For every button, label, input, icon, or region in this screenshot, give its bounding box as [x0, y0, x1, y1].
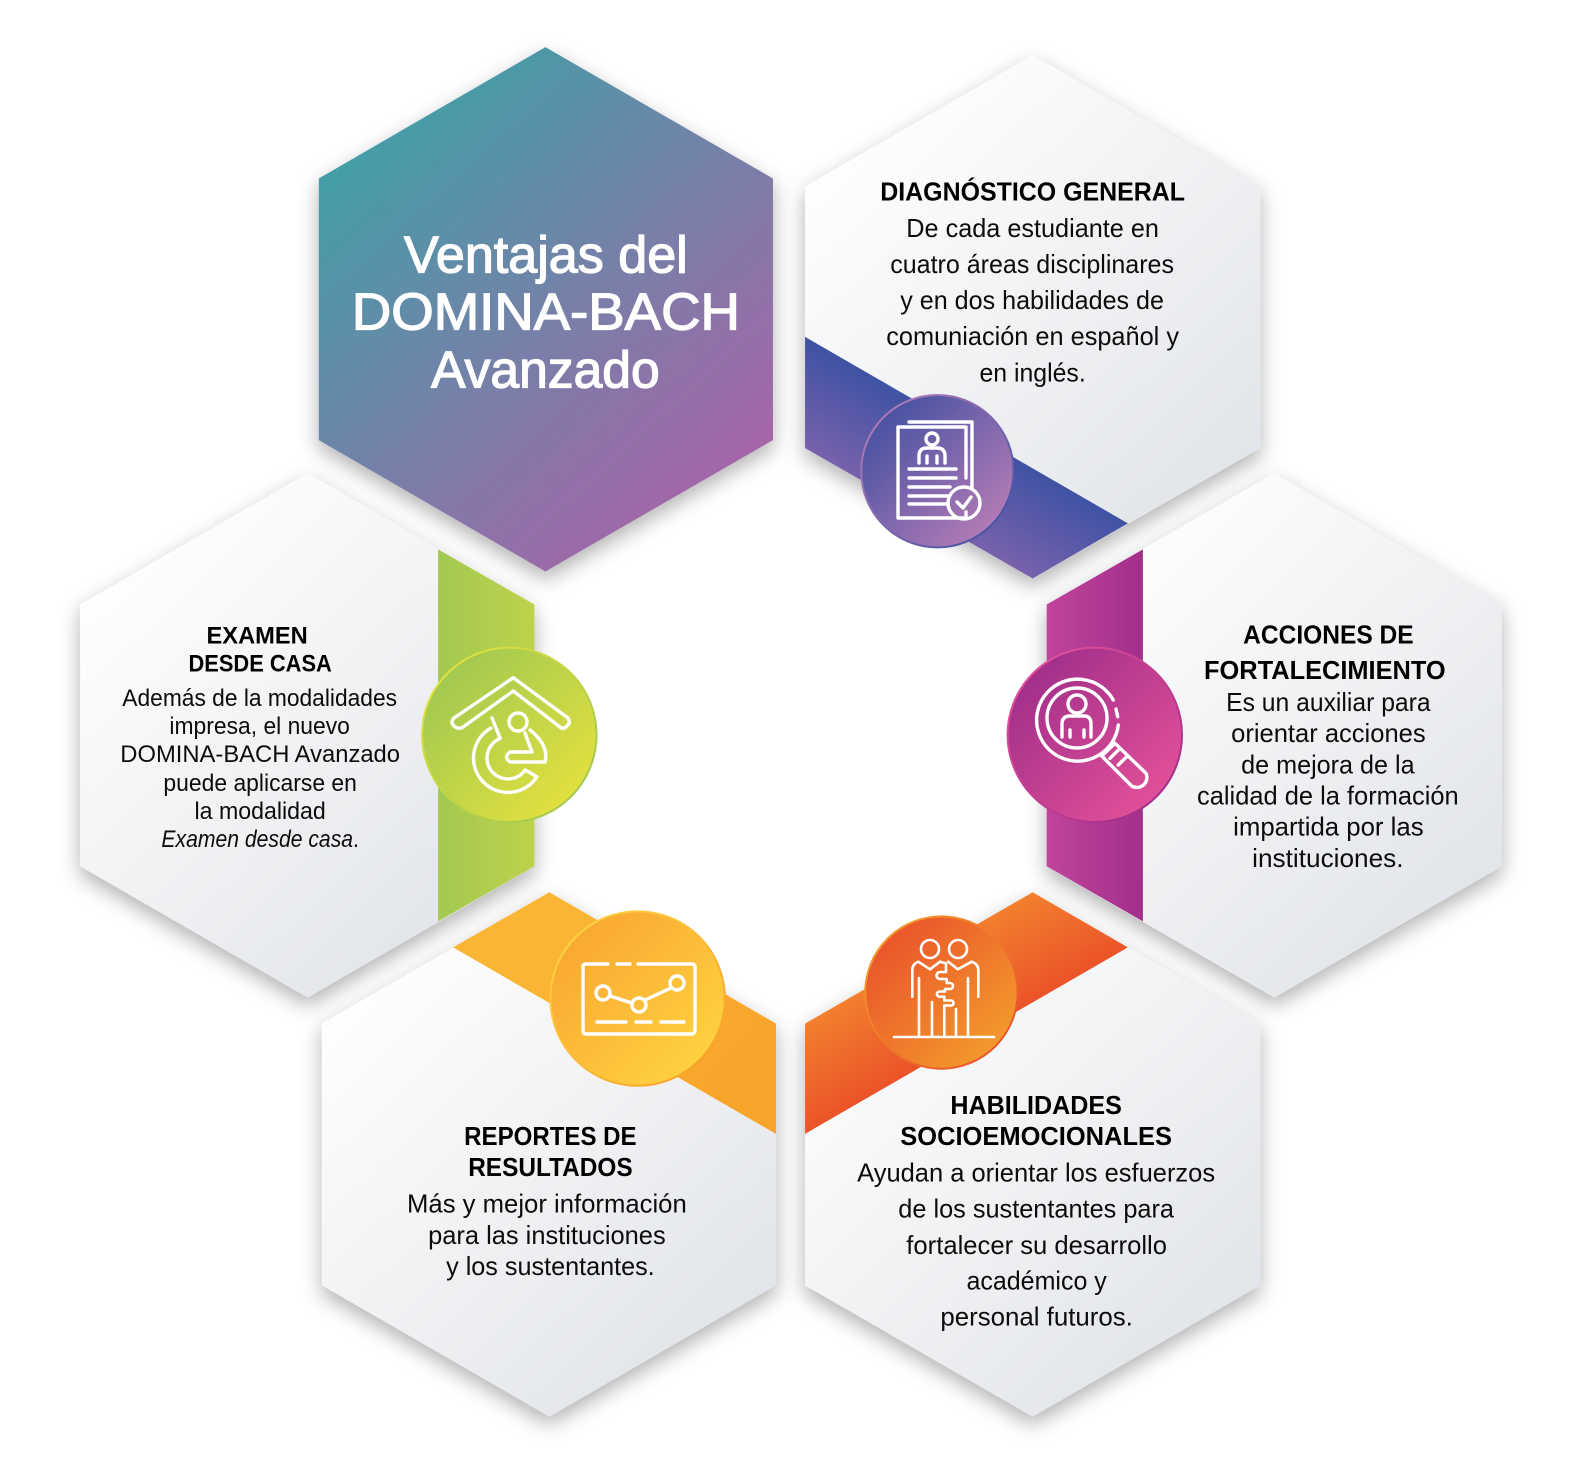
description: académico y: [966, 1265, 1107, 1295]
panel: title hexagon: [319, 47, 773, 571]
heading: FORTALECIMIENTO: [1204, 655, 1446, 685]
description: impresa, el nuevo: [169, 713, 350, 740]
heading: RESULTADOS: [468, 1152, 633, 1182]
heading: [1204, 620, 1446, 685]
heading: [464, 1121, 637, 1182]
title: Ventajas del: [404, 227, 688, 285]
description: fortalecer su desarrollo: [906, 1230, 1167, 1260]
heading: REPORTES DE: [464, 1121, 637, 1151]
description: [1197, 687, 1459, 873]
description: puede aplicarse en: [163, 770, 357, 797]
description: Examen desde casa.: [161, 826, 359, 853]
colored band: [438, 549, 534, 921]
description: en inglés.: [979, 357, 1086, 387]
description: DOMINA-BACH Avanzado: [120, 741, 400, 768]
icon: magnifier with person: [1008, 648, 1182, 822]
description: Ayudan a orientar los esfuerzos: [857, 1158, 1215, 1188]
description: instituciones.: [1252, 843, 1404, 873]
colored band: [805, 337, 1128, 578]
heading: SOCIOEMOCIONALES: [900, 1121, 1172, 1151]
heading: [900, 1090, 1172, 1151]
title: Avanzado: [431, 341, 660, 399]
panel: examen desde casa: [80, 473, 1260, 1417]
description: de mejora de la: [1241, 749, 1415, 779]
description: impartida por las: [1233, 812, 1424, 842]
description: la modalidad: [194, 798, 326, 825]
icon: chart on screen: [550, 911, 725, 1086]
colored band: [453, 892, 776, 1134]
heading: DIAGNÓSTICO GENERAL: [880, 177, 1185, 207]
heading: [188, 623, 332, 678]
title: [352, 227, 740, 399]
description: calidad de la formación: [1197, 781, 1459, 811]
description: personal futuros.: [940, 1301, 1133, 1331]
icon: house with wheelchair user: [422, 648, 597, 822]
colored band: [1047, 549, 1143, 921]
heading: ACCIONES DE: [1243, 620, 1414, 650]
description: de los sustentantes para: [898, 1194, 1174, 1224]
description: comuniación en español y: [886, 321, 1179, 351]
heading: HABILIDADES: [950, 1090, 1122, 1120]
description: [120, 685, 400, 853]
description: y en dos habilidades de: [900, 285, 1164, 315]
description: [407, 1189, 687, 1281]
heading: DESDE CASA: [188, 651, 332, 678]
description: Además de la modalidades: [122, 685, 397, 712]
description: Más y mejor información: [407, 1189, 687, 1219]
description: [857, 1158, 1215, 1331]
icon: document with person and check: [861, 395, 1014, 547]
description: orientar acciones: [1231, 718, 1426, 748]
panel: acciones de fortalecimiento: [80, 473, 1502, 1417]
heading: EXAMEN: [207, 623, 308, 650]
title: DOMINA-BACH: [352, 283, 740, 341]
description: [886, 213, 1179, 387]
description: Es un auxiliar para: [1226, 687, 1431, 717]
colored band: [805, 892, 1128, 1134]
description: para las instituciones: [428, 1220, 666, 1250]
panel: habilidades socioemocionales: [805, 892, 1260, 1417]
icon: two people with puzzle seam: [865, 916, 1018, 1069]
description: cuatro áreas disciplinares: [890, 249, 1174, 279]
description: De cada estudiante en: [906, 213, 1159, 243]
panel: reportes de resultados: [322, 892, 1260, 1417]
description: y los sustentantes.: [446, 1251, 655, 1281]
